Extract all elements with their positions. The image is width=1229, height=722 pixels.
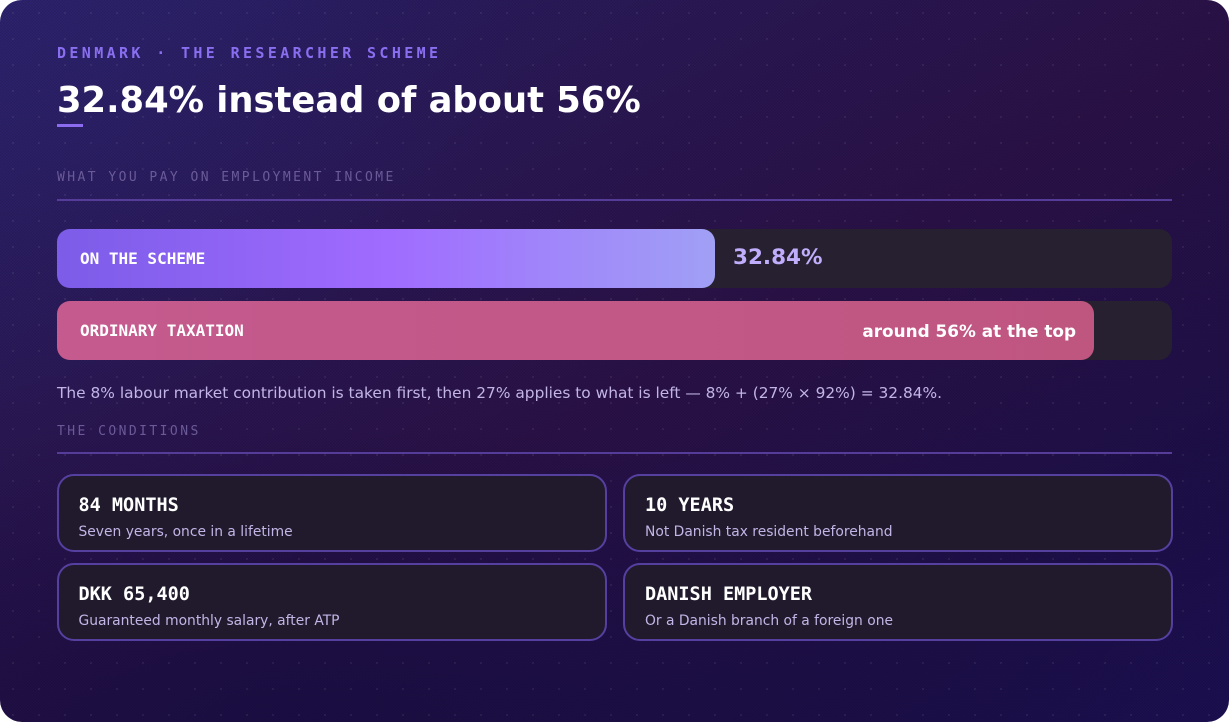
bar fill — [57, 301, 1094, 360]
card title: 10 YEARS — [645, 495, 734, 516]
card: salary — [56, 563, 606, 641]
section label: conditions: THE CONDITIONS — [57, 424, 201, 439]
explanatory note: The 8% labour market contribution is taken first, then 27% applies to what is left — 8% + (27% × 92%) = 32.84%. — [57, 384, 942, 402]
card title: DKK 65,400 — [78, 584, 190, 605]
bar label: ON THE SCHEME — [80, 249, 205, 268]
title accent — [57, 124, 83, 127]
eyebrow: DENMARK · THE RESEARCHER SCHEME — [57, 44, 441, 62]
bar fill — [57, 229, 715, 288]
bar value: around 56% at the top — [862, 321, 1076, 341]
bar label: ORDINARY TAXATION — [80, 321, 244, 340]
title: 32.84% instead of about 56% — [57, 80, 641, 121]
bar: on the scheme — [57, 229, 1172, 288]
section label: what you pay: WHAT YOU PAY ON EMPLOYMENT INCOME — [57, 170, 396, 185]
card text: Seven years, once in a lifetime — [78, 524, 293, 540]
card: employer — [623, 563, 1173, 641]
card title: DANISH EMPLOYER — [645, 584, 812, 605]
bar: ordinary taxation — [57, 301, 1172, 360]
card text: Or a Danish branch of a foreign one — [645, 613, 893, 629]
bar value: 32.84% — [733, 245, 823, 270]
card title: 84 MONTHS — [78, 495, 179, 516]
card: 84 months — [56, 474, 606, 552]
card: 10 years — [623, 474, 1173, 552]
card text: Guaranteed monthly salary, after ATP — [78, 613, 340, 629]
card text: Not Danish tax resident beforehand — [645, 524, 893, 540]
